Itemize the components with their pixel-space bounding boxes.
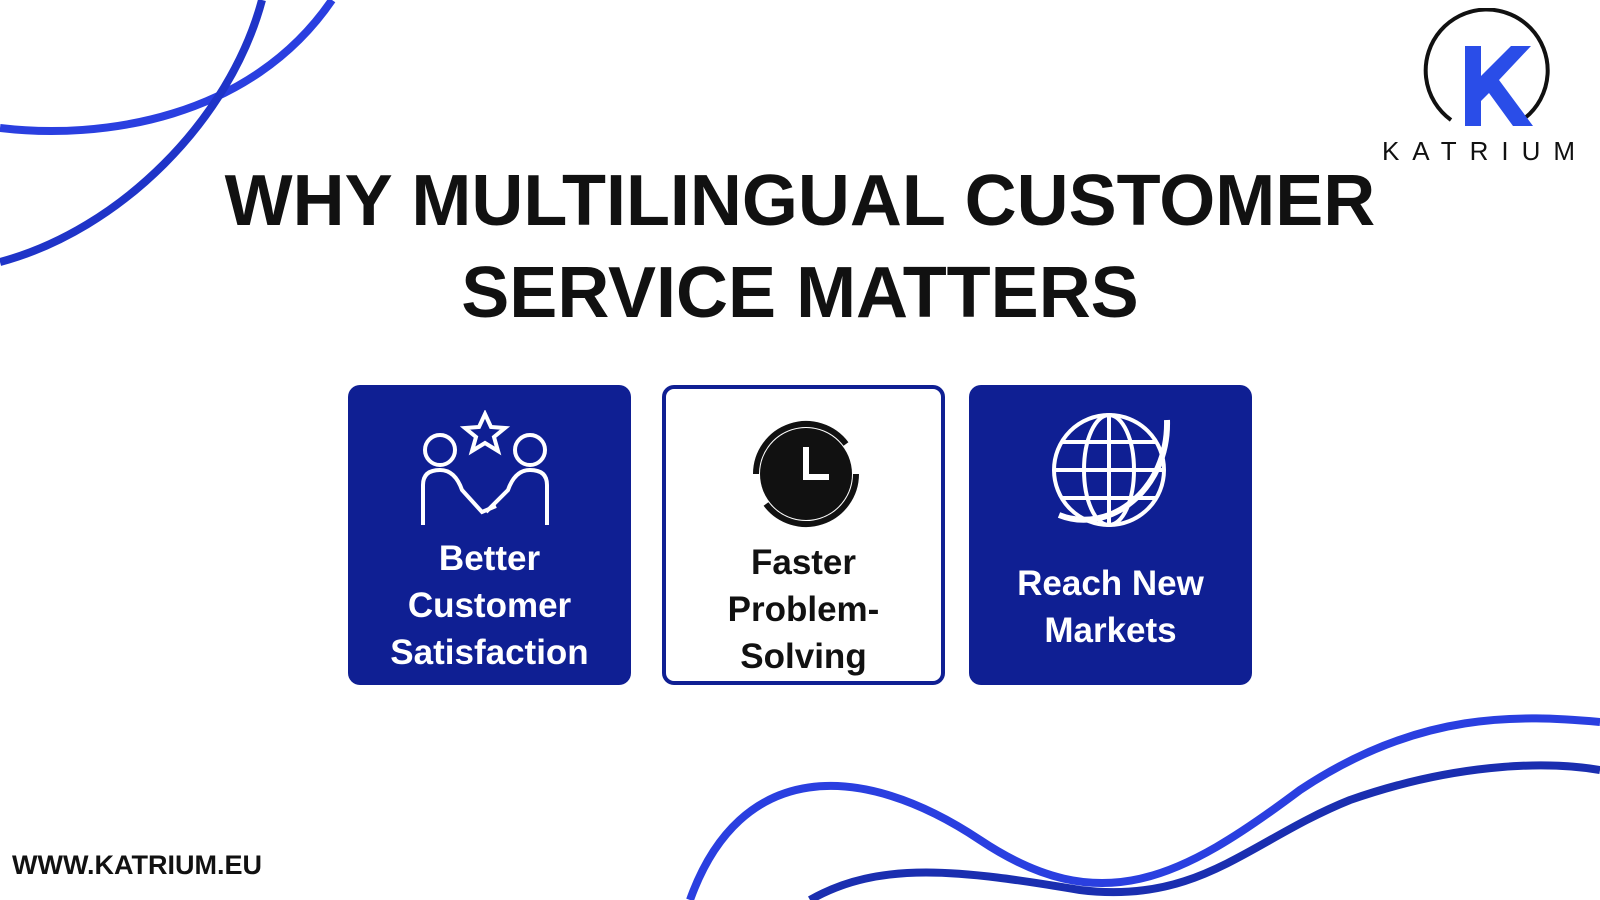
panel: faster problem-solving (662, 385, 945, 685)
panel: faster problem-solving: Problem- (728, 590, 879, 629)
panel: better customer satisfaction: Satisfaction (390, 633, 589, 672)
panel: better customer satisfaction (348, 385, 631, 685)
title: SERVICE MATTERS (461, 253, 1139, 333)
panel: better customer satisfaction: Customer (408, 586, 571, 625)
website url: WWW.KATRIUM.EU (12, 850, 262, 880)
title (224, 161, 1375, 333)
panel: reach new markets: Reach New (1017, 564, 1204, 603)
icon: handshake (421, 410, 549, 525)
panel: faster problem-solving: Faster (751, 543, 856, 582)
panel: reach new markets (969, 385, 1252, 685)
icon: globe (1052, 413, 1170, 527)
panel: reach new markets: Markets (1044, 611, 1177, 650)
icon: clock (753, 420, 859, 528)
logo: KATRIUM (1382, 136, 1588, 166)
logo (1382, 8, 1588, 166)
title: WHY MULTILINGUAL CUSTOMER (225, 161, 1375, 241)
panel: better customer satisfaction: Better (439, 539, 540, 578)
panel: faster problem-solving: Solving (740, 637, 867, 676)
